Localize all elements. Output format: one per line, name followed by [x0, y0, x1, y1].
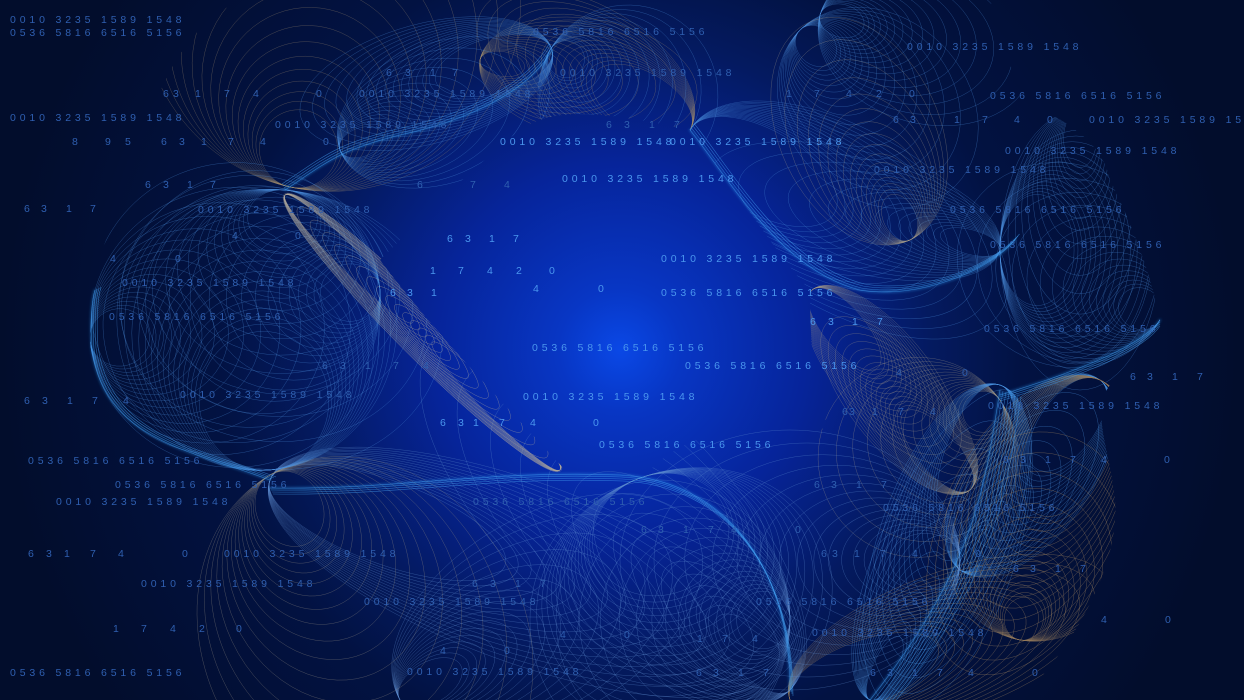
outer digit rows: 0536 5816 6516 5156: [883, 502, 1058, 514]
centre digit rows: 631: [390, 287, 441, 299]
centre digit rows: 6317: [447, 233, 523, 245]
outer digit rows: 0010 3235 1589 1548: [359, 88, 534, 100]
outer digit rows: 0010 3235 1589 1548: [224, 548, 399, 560]
outer digit rows: 0010 3235 1589 1548: [988, 400, 1163, 412]
outer digit rows: 40: [896, 367, 972, 379]
outer digit rows: 0010 3235 1589 1548: [275, 119, 450, 131]
outer digit rows: 631740: [28, 548, 192, 560]
centre digit rows: 6317: [810, 316, 887, 328]
outer digit rows: 0536 5816 6516 5156: [950, 204, 1125, 216]
outer digit rows: 6317: [1013, 563, 1090, 575]
outer digit rows: 0536 5816 6516 5156: [10, 27, 185, 39]
ribbon: right bright band mesh: [852, 372, 1108, 700]
outer digit rows: 0010 3235 1589 1548: [122, 277, 297, 289]
outer digit rows: 174: [697, 633, 762, 645]
outer digit rows: 63174: [24, 395, 133, 407]
outer digit rows: 0010 3235 1589 1548: [874, 164, 1049, 176]
centre digit rows: 0536 5816 6516 5156: [599, 439, 774, 451]
outer digit rows: 0010 3235 1589 1548: [812, 627, 987, 639]
outer digit rows: 895631740: [72, 136, 333, 148]
centre digit rows: 17420: [430, 265, 559, 277]
centre digit rows: 0010 3235 1589 1548: [523, 391, 698, 403]
outer digit rows: 631740: [893, 114, 1057, 126]
outer digit rows: 0536 5816 6516 5156: [990, 90, 1165, 102]
outer digit rows: 0010 3235 1589 1548: [407, 666, 582, 678]
outer digit rows: 631740: [821, 548, 985, 560]
outer digit rows: 0010 3235 1589 1548: [198, 204, 373, 216]
centre digit rows: [390, 136, 887, 451]
centre digit rows: 631740: [440, 417, 603, 429]
outer digit rows: 6317: [386, 67, 462, 79]
centre digit rows: 0010 3235 1589 1548: [661, 253, 836, 265]
outer digit rows: 0010 3235 1589 1548: [141, 578, 316, 590]
outer digit rows: 40: [1101, 614, 1175, 626]
outer digit rows: 0010 3235 1589 1548: [180, 389, 355, 401]
outer digit rows: 0010 3235 1589 1548: [10, 112, 185, 124]
outer digit rows: 6317: [472, 578, 550, 590]
outer digit rows: 631740: [870, 667, 1042, 679]
ribbon: upper-right mesh: [690, 0, 1160, 390]
outer digit rows: 0010 3235 1589 1548: [1005, 145, 1180, 157]
outer digit rows: 631740: [1003, 454, 1174, 466]
outer digit rows: 40: [560, 629, 634, 641]
centre digit rows: 0536 5816 6516 5156: [661, 287, 836, 299]
outer digit rows: 40: [232, 230, 305, 242]
outer digit rows: 0536 5816 6516 5156: [990, 239, 1165, 251]
outer digit rows: 0536 5816 6516 5156: [756, 596, 931, 608]
ribbon: pale lower rings: [196, 456, 534, 700]
centre digit rows: 0536 5816 6516 5156: [685, 360, 860, 372]
outer digit rows: 63174: [322, 360, 433, 372]
outer digit rows: 0536 5816 6516 5156: [473, 496, 648, 508]
outer digit rows: 0536 5816 6516 5156: [28, 455, 203, 467]
outer digit rows: 6317: [24, 203, 100, 215]
outer digit rows: 17420: [113, 623, 246, 635]
outer digit rows: 674: [417, 179, 514, 191]
centre digit rows: 40: [533, 283, 608, 295]
outer digit rows: 631740: [641, 524, 805, 536]
centre digit rows: 0536 5816 6516 5156: [532, 342, 707, 354]
outer digit rows: 6317: [1130, 371, 1207, 383]
ribbon: pale diagonal band: [282, 192, 562, 472]
outer digit rows: 0536 5816 6516 5156: [533, 26, 708, 38]
outer digit rows: 63174: [842, 406, 940, 418]
outer digit rows: 0536 5816 6516 5156: [10, 667, 185, 679]
ribbon: orange upper-left rings: [162, 0, 698, 192]
centre digit rows: 0010 3235 1589 1548: [500, 136, 675, 148]
bright blue ribbon edges: [91, 50, 1160, 700]
outer digit rows: 0536 5816 6516 5156: [984, 323, 1159, 335]
centre digit rows: 0010 3235 1589 1548: [562, 173, 737, 185]
ribbon: pale right-centre bands: [770, 17, 1018, 558]
outer digit rows: 40: [440, 645, 514, 657]
outer digit rows: 17420: [786, 88, 919, 100]
outer digit rows: 631740: [163, 88, 326, 100]
outer digit rows: 0010 3235 1589 1548: [56, 496, 231, 508]
outer digit rows: 0010 3235 1589 1548: [364, 596, 539, 608]
centre digit rows: 0010 3235 1589 1548: [670, 136, 845, 148]
outer digit rows: 6317: [145, 179, 220, 191]
outer digit rows: 40: [110, 253, 185, 265]
outer digit rows: 0010 3235 1589 1548: [907, 41, 1082, 53]
outer digit rows: 0536 5816 6516 5156: [115, 479, 290, 491]
outer digit rows: 0010 3235 1589 1548: [10, 14, 185, 26]
ribbon: lower centre contour lines: [268, 334, 960, 700]
ribbon: blue upper knot: [300, 4, 718, 188]
outer digit rows: 6317: [696, 667, 773, 679]
outer digit rows: 6317: [606, 119, 684, 131]
outer digit rows: 0536 5816 6516 5156: [109, 311, 284, 323]
ribbon: orange lower-right rings: [788, 375, 1116, 700]
outer digit rows: 6317: [814, 479, 891, 491]
ribbon: left blue loops: [90, 162, 443, 471]
outer digit rows: 0010 3235 1589 1548: [560, 67, 735, 79]
